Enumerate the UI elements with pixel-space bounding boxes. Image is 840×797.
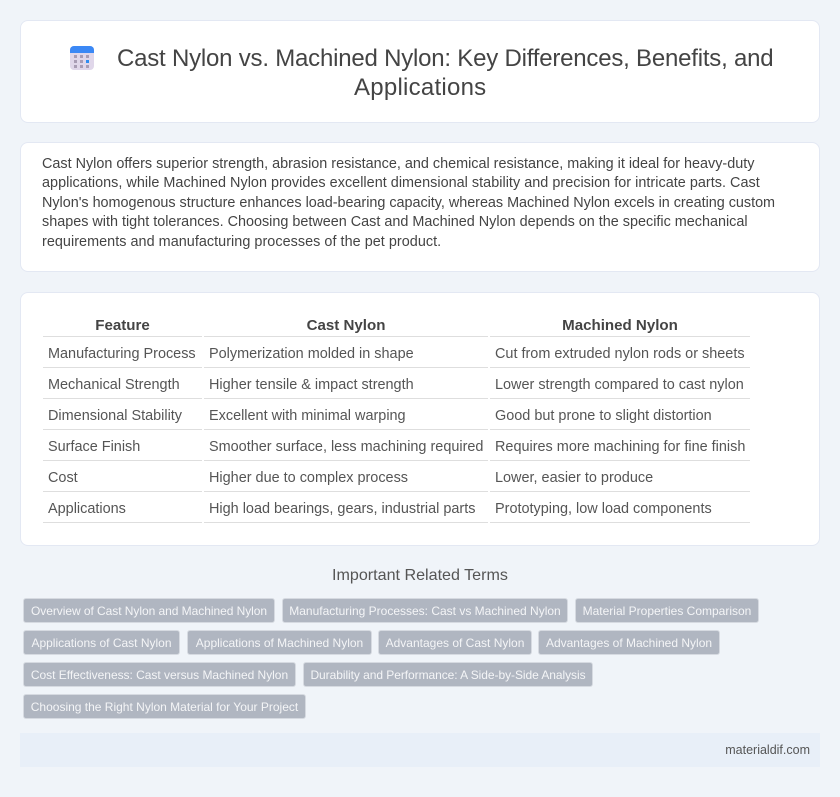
row: cost: Lower, easier to produce: [495, 470, 653, 486]
row: manufacturing process: [48, 346, 745, 362]
heading: important related terms: Important Related Terms: [332, 566, 508, 584]
text: shapes with tight tolerances. Choosing between Cast and Machined Nylon depends on the specific mechanical: [42, 214, 748, 230]
row: dimensional stability: Dimensional Stability: [48, 408, 182, 424]
row: cost: [48, 470, 653, 486]
text: Nylon's homogenous structure enhances load-bearing capacity, whereas Machined Nylon excels in creating custom: [42, 195, 775, 211]
footer bar: [20, 733, 820, 767]
related term tags: [23, 598, 759, 719]
tag: Advantages of Cast Nylon: [386, 636, 524, 650]
tag: Overview of Cast Nylon and Machined Nylon: [31, 604, 267, 618]
text: Cast Nylon vs. Machined Nylon: Key Differences, Benefits, and: [117, 45, 773, 72]
tag: [187, 630, 372, 655]
tag: Cost Effectiveness: Cast versus Machined Nylon: [31, 668, 288, 682]
tag: [538, 630, 720, 655]
text: requirements and manufacturing processes of the pet product.: [42, 234, 441, 250]
row: applications: Prototyping, low load components: [495, 501, 712, 517]
row: cost: Cost: [48, 470, 78, 486]
tag: Durability and Performance: A Side-by-Side Analysis: [310, 668, 586, 682]
row: mechanical strength: Lower strength compared to cast nylon: [495, 377, 744, 393]
row: mechanical strength: Higher tensile & impact strength: [209, 377, 414, 393]
row: cost: Higher due to complex process: [209, 470, 408, 486]
row: surface finish: [48, 439, 745, 455]
tag: [282, 598, 568, 623]
row: dimensional stability: [48, 408, 712, 424]
summary text: [42, 156, 775, 250]
row: mechanical strength: Mechanical Strength: [48, 377, 180, 393]
comparison table: [43, 316, 750, 523]
table header: Feature: [95, 316, 150, 334]
row: manufacturing process: Polymerization molded in shape: [209, 346, 414, 362]
tag: [23, 598, 275, 623]
row: manufacturing process: Cut from extruded nylon rods or sheets: [495, 346, 745, 362]
title: [117, 45, 773, 101]
footer source: materialdif.com: [725, 743, 810, 757]
row: applications: High load bearings, gears, industrial parts: [209, 501, 475, 517]
panel: title card: [20, 20, 820, 123]
text: applications, while Machined Nylon provides excellent dimensional stability and precision for intricate parts. Cast: [42, 175, 760, 191]
tag: [23, 630, 180, 655]
tag: Material Properties Comparison: [583, 604, 751, 618]
panel: summary card: [20, 142, 820, 272]
tag: Applications of Cast Nylon: [31, 636, 172, 650]
table header: [95, 316, 678, 334]
tag: [23, 662, 296, 687]
row: surface finish: Surface Finish: [48, 439, 140, 455]
tag: Advantages of Machined Nylon: [546, 636, 712, 650]
row: mechanical strength: [48, 377, 744, 393]
tag: Manufacturing Processes: Cast vs Machined Nylon: [289, 604, 561, 618]
table header: Cast Nylon: [307, 316, 385, 334]
row: applications: Applications: [48, 501, 126, 517]
tag: Choosing the Right Nylon Material for Your Project: [31, 700, 298, 714]
tag: [575, 598, 759, 623]
row: surface finish: Smoother surface, less machining required: [209, 439, 483, 455]
tag: [378, 630, 532, 655]
tag: [23, 694, 306, 719]
row: dimensional stability: Excellent with minimal warping: [209, 408, 406, 424]
panel: comparison table card: [20, 292, 820, 546]
tag: Applications of Machined Nylon: [196, 636, 363, 650]
row: manufacturing process: Manufacturing Process: [48, 346, 196, 362]
text: Applications: [354, 74, 486, 101]
row: surface finish: Requires more machining for fine finish: [495, 439, 745, 455]
table header: Machined Nylon: [562, 316, 678, 334]
row: dimensional stability: Good but prone to slight distortion: [495, 408, 712, 424]
tag: [303, 662, 593, 687]
icon: calendar: [70, 46, 94, 70]
text: Cast Nylon offers superior strength, abrasion resistance, and chemical resistance, making it ideal for heavy-duty: [42, 156, 754, 172]
row: applications: [48, 501, 712, 517]
